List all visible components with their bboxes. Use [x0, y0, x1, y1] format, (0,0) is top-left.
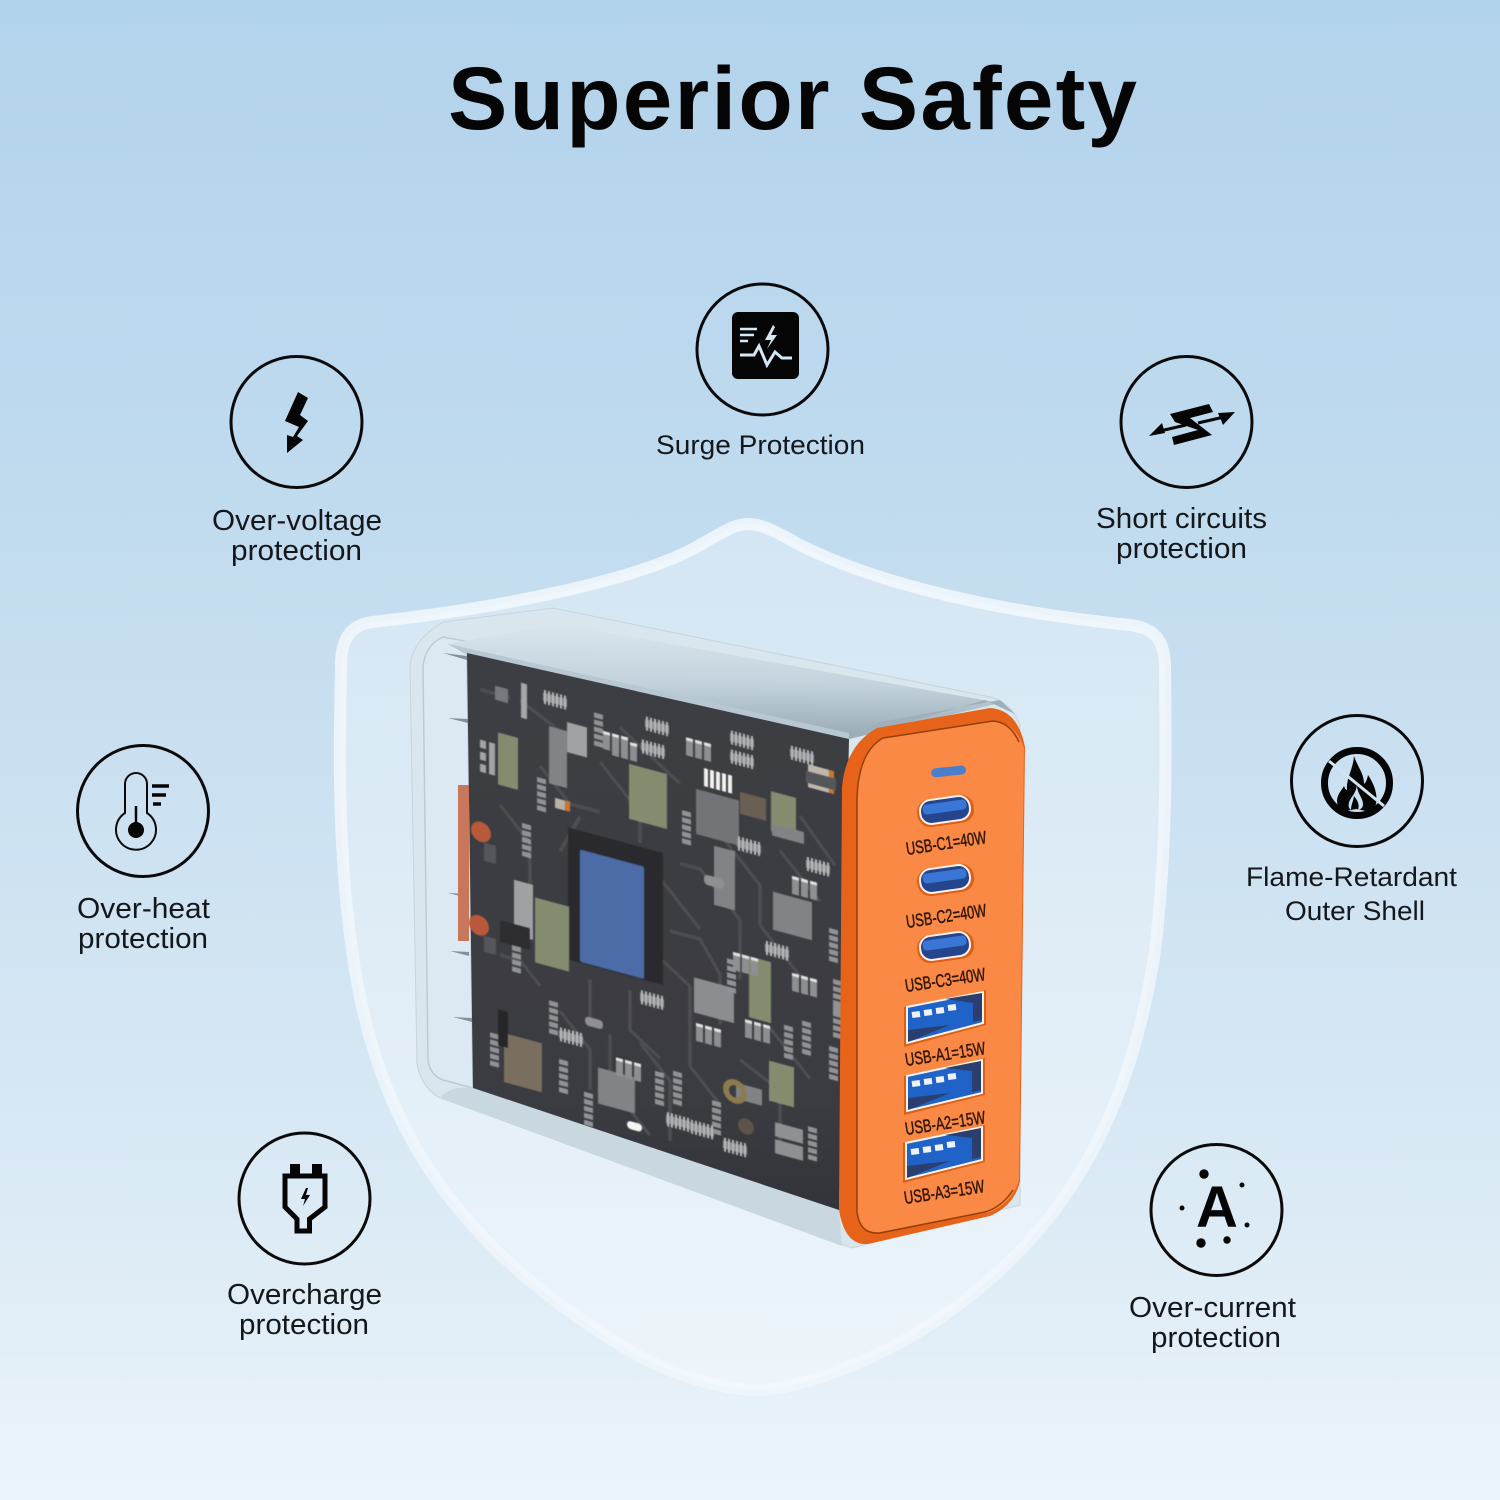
icon: plug: [285, 1164, 325, 1231]
port labels: USB-C1=40W: [905, 827, 988, 859]
label: short circuits: protection: [1116, 533, 1247, 565]
label: short circuits: Short circuits: [1096, 503, 1267, 535]
icon: no flame: [1324, 750, 1390, 816]
icon group: overcharge: [239, 1133, 370, 1264]
port labels: USB-A2=15W: [904, 1107, 987, 1139]
icon group: over-heat: [78, 746, 208, 876]
icon: surge: [732, 312, 799, 379]
label: over-heat: Over-heat: [77, 893, 210, 925]
label: over-heat: [77, 893, 210, 955]
label: over-voltage: [212, 505, 382, 567]
port labels: USB-A3=15W: [903, 1176, 986, 1208]
label: overcharge: Overcharge: [227, 1279, 382, 1311]
port labels: USB-C2=40W: [905, 900, 988, 932]
icon: short circuit arrows: [1149, 404, 1235, 445]
icon group: surge protection: [697, 284, 828, 415]
title: Superior Safety: [448, 48, 1138, 148]
circuit components: [469, 659, 842, 1194]
icon: ampere: A: [1196, 1175, 1238, 1240]
icon group: flame retardant: [1292, 716, 1422, 846]
label: surge protection: Surge Protection: [656, 430, 865, 460]
orange faceplate: [839, 708, 1025, 1244]
icon group: over-voltage: [231, 356, 362, 488]
label: over-current: [1129, 1292, 1296, 1354]
port labels: USB-A1=15W: [904, 1038, 987, 1070]
USB-C ports: [915, 793, 976, 965]
port labels: [903, 827, 988, 1208]
transparent shell: [410, 608, 1020, 1248]
LED indicator: [931, 765, 966, 778]
label: over-current: protection: [1151, 1322, 1281, 1354]
icon: thermometer: [116, 773, 169, 850]
label: over-voltage: Over-voltage: [212, 505, 382, 537]
circuit board: [467, 653, 849, 1210]
icon group: over-current: [1151, 1144, 1282, 1276]
USB-A ports: [903, 990, 986, 1183]
label: overcharge: protection: [239, 1309, 369, 1341]
charger illustration: [410, 608, 1025, 1248]
label: flame retardant: [1246, 862, 1458, 926]
label: flame retardant: Outer Shell: [1285, 896, 1425, 926]
label: over-current: Over-current: [1129, 1292, 1296, 1324]
port labels: USB-C3=40W: [904, 964, 987, 996]
shield: [340, 524, 1166, 1390]
label: over-voltage: protection: [231, 535, 362, 567]
icon group: short circuits: [1121, 356, 1252, 488]
label: overcharge: [227, 1279, 382, 1341]
icon: bolt: [285, 392, 308, 453]
label: short circuits: [1096, 503, 1267, 565]
label: flame retardant: Flame-Retardant: [1246, 862, 1458, 892]
label: over-heat: protection: [78, 923, 208, 955]
